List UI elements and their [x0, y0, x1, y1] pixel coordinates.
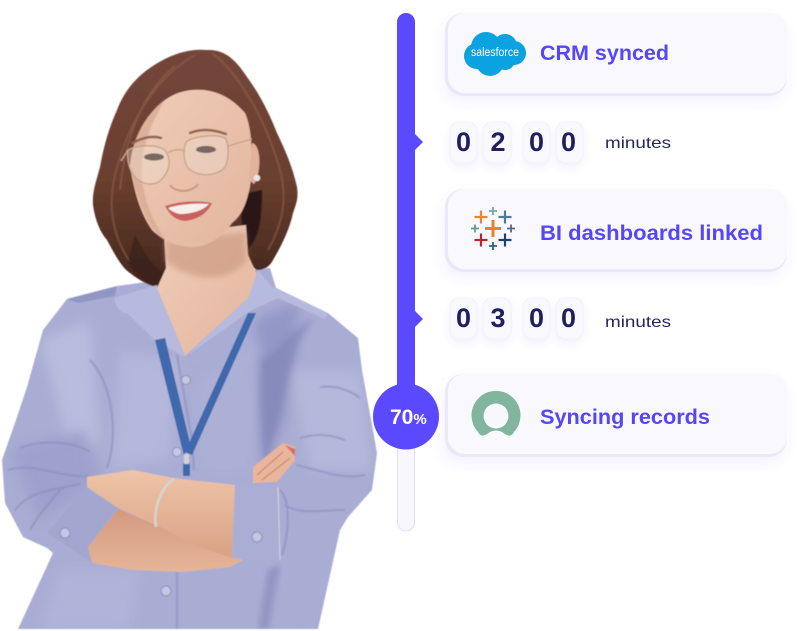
- counter: 0300 minutes: 0: [529, 303, 544, 333]
- icon: green ring: [471, 391, 521, 436]
- glasses: [121, 136, 252, 184]
- marker: 200 minutes: [414, 133, 423, 151]
- counter: 0200 minutes: 2: [490, 127, 506, 157]
- right cuff: [232, 485, 280, 560]
- progress track: [373, 13, 439, 531]
- buttons: [60, 376, 262, 596]
- eyes: [144, 153, 164, 161]
- forearm under: [88, 509, 243, 572]
- marker: 300 minutes: [414, 310, 423, 328]
- counter: 0300 minutes: minutes: [605, 314, 671, 331]
- counter: 0200 minutes: 0: [529, 127, 544, 157]
- lanyard: [155, 313, 256, 476]
- right shirt collar: [185, 270, 328, 357]
- shirt: [0, 260, 400, 631]
- label: Syncing records: [540, 406, 710, 429]
- person: woman with glasses and crossed arms: [0, 50, 400, 631]
- card: CRM synced: [445, 13, 787, 96]
- counter: 0300 minutes: 3: [490, 303, 506, 333]
- counter: 0200 minutes: 0: [561, 127, 576, 157]
- counter: 0300 minutes: [450, 298, 671, 339]
- hand: [253, 443, 295, 483]
- icon: tableau crosses: [471, 207, 515, 250]
- label: BI dashboards linked: [540, 222, 763, 245]
- counter: 0300 minutes: 0: [561, 303, 576, 333]
- hair back: [93, 50, 298, 287]
- left shirt collar: [67, 286, 117, 303]
- counter: 0200 minutes: minutes: [605, 135, 671, 152]
- face: [130, 90, 252, 247]
- progress badge 70%: 70%: [390, 406, 427, 429]
- ear and earring: [249, 143, 259, 184]
- counter: 0300 minutes: 0: [456, 303, 471, 333]
- nose: [170, 184, 198, 191]
- card: Syncing records: [445, 374, 787, 457]
- card: BI dashboards linked: [445, 189, 787, 272]
- left cuff: [47, 488, 118, 563]
- counter: 0200 minutes: 0: [456, 127, 471, 157]
- eyebrows: [133, 130, 226, 143]
- forearm over: [87, 470, 235, 558]
- label: CRM synced: [540, 42, 669, 65]
- progress fill: [397, 13, 415, 408]
- smile: [165, 201, 212, 221]
- counter: 0200 minutes: [450, 122, 671, 163]
- icon: salesforce cloud: salesforce: [471, 47, 519, 59]
- progress badge 70%: [373, 384, 439, 450]
- bracelet: [155, 479, 174, 527]
- icon: salesforce cloud: [464, 32, 526, 76]
- neck and chest: [157, 225, 258, 356]
